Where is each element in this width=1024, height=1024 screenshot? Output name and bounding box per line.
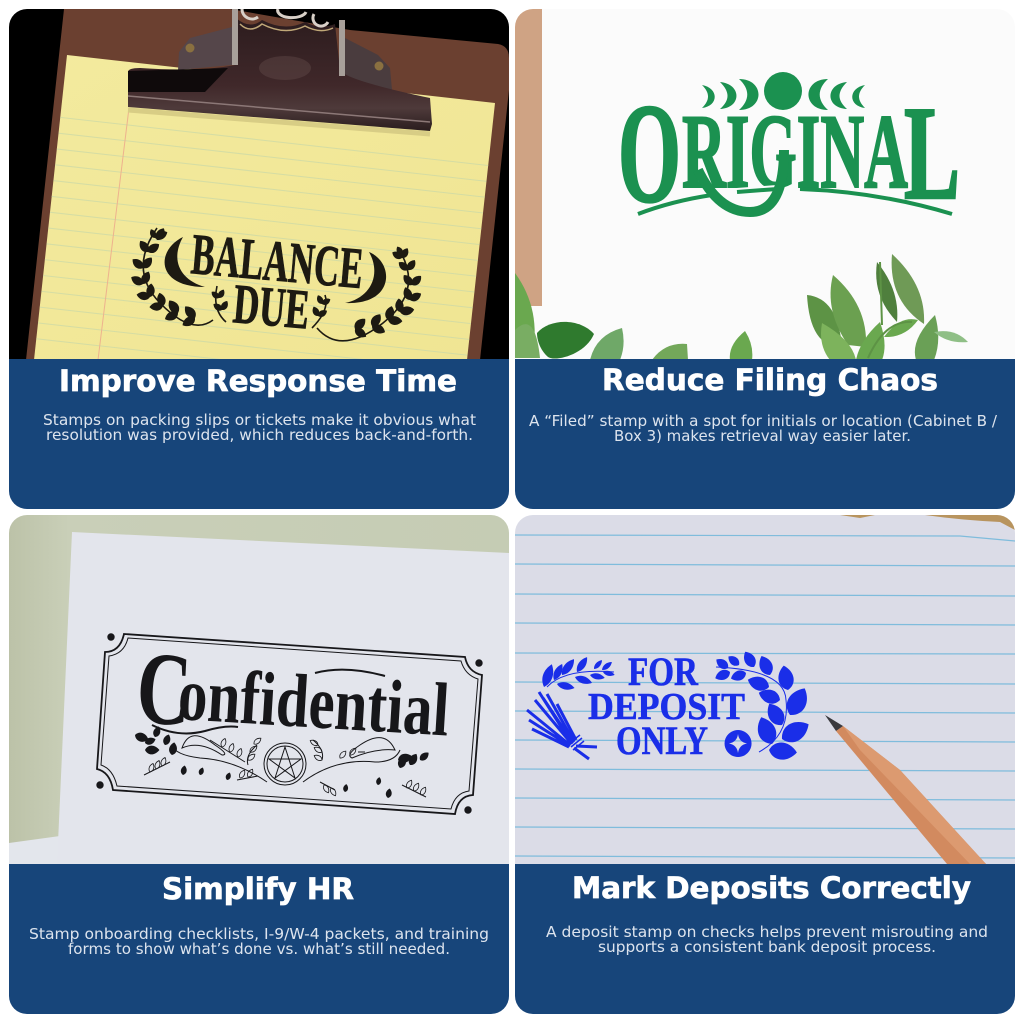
left sprig: [547, 671, 614, 687]
heading: Improve Response Time: [59, 364, 457, 398]
stamp: Original: O: [618, 74, 681, 232]
floral sprigs: [144, 736, 426, 797]
body text: Stamps on packing slips or tickets make it obvious what: [43, 411, 476, 429]
bundle: [527, 692, 597, 759]
stamp: Balance Due: BALANCE: [189, 221, 366, 301]
stamp: For Deposit Only: [527, 649, 813, 763]
panel: Improve Response Time: [9, 9, 510, 509]
pencil: [825, 715, 986, 864]
photo: white card on sage: [9, 515, 509, 865]
photo: white card with leaves: [515, 9, 1015, 360]
body text: Stamp onboarding checklists, I-9/W-4 packets, and training: [29, 925, 489, 943]
stamp: For Deposit Only: FOR: [628, 649, 699, 694]
leaves: [515, 254, 968, 360]
stamp: Confidential: [96, 630, 483, 814]
photo: clipboard on black: [9, 9, 510, 392]
pentagram seal: [264, 743, 306, 785]
panel: Simplify HR: [9, 515, 509, 1014]
clipboard board: [26, 9, 509, 360]
caption card: [9, 864, 509, 1014]
caption card: [9, 359, 509, 509]
body text: A “Filed” stamp with a spot for initials or location (Cabinet B /: [529, 412, 998, 430]
photo: ruled paper with pencil: [515, 515, 1015, 865]
caption card: [515, 359, 1015, 509]
body text: [43, 411, 476, 444]
body text: [29, 925, 489, 958]
caption card: [515, 864, 1015, 1014]
right wreath: [716, 667, 786, 752]
body text: [546, 923, 988, 956]
stamp: Original: [621, 72, 958, 217]
stamp: Original: L: [904, 79, 960, 227]
panel: Reduce Filing Chaos: [515, 9, 1015, 509]
metal clip: [128, 9, 432, 134]
body text: A deposit stamp on checks helps prevent misrouting and: [546, 923, 988, 941]
heading: Simplify HR: [162, 872, 354, 906]
body text: supports a consistent bank deposit process.: [598, 938, 936, 956]
yellow legal paper: [34, 55, 495, 360]
stamp: Balance Due: [129, 221, 424, 342]
stamp: For Deposit Only: ONLY: [616, 718, 708, 763]
body text: Box 3) makes retrieval way easier later.: [614, 427, 911, 445]
heading: Reduce Filing Chaos: [602, 363, 938, 397]
stamp: Confidential: onfidential: [176, 652, 452, 753]
panel: Mark Deposits Correctly: [515, 515, 1015, 1014]
heading: Mark Deposits Correctly: [572, 871, 971, 905]
body text: [529, 412, 998, 445]
body text: resolution was provided, which reduces back-and-forth.: [46, 426, 473, 444]
body text: forms to show what’s done vs. what’s still needed.: [68, 940, 450, 958]
stamp: Confidential: C: [134, 630, 195, 748]
star coin: [725, 730, 752, 757]
stamp: Balance Due: DUE: [231, 273, 312, 342]
stamp: For Deposit Only: DEPOSIT: [588, 686, 745, 728]
